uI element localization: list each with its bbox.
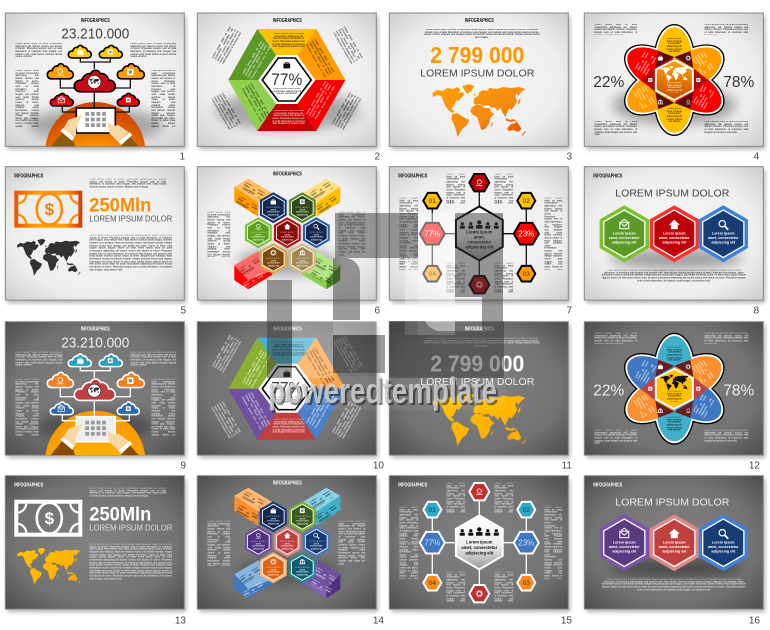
wing top right <box>301 488 340 526</box>
node 77 percent: 77% <box>424 230 440 239</box>
node 77 percent <box>420 532 445 554</box>
node 77 percent <box>420 223 445 245</box>
slide 4: atom flower, light <box>584 13 765 149</box>
node 04 <box>423 266 441 281</box>
connectors <box>432 493 526 594</box>
connectors <box>60 57 130 112</box>
heading: INFOGRAPHICS <box>81 327 110 333</box>
hexagon captions <box>249 207 325 268</box>
icon: banknote: $ <box>45 200 55 219</box>
text bottom: Lorem ipsum dolor sit amet, consectetur adipiscing elit. Mauris massa sed dictum et lorem. Phasellus tempor sem ut nulla bibendum, id maximus ante feugiat, sed pretium velit. Nulla facilisi vivamus lacinia neque ut tortor. Aliquam erat volutpat, etiam fermentum massa sed dictum blandit. Integer posuere lectus quis magna, sed mattis nisi porta. Donec in tellus vitae sapien dictum aliquet. Morbi vel nibh lorem ipsum dolor sit amet consectetur adipiscing elit mauris massa sed dictum et lorem. Phasellus tempor sem ut nulla bibendum, id maximus ante feugiat, sed pretium velit. Nulla facilisi vivamus lacinia neque ut tortor. Aliquam erat volutpat, etiam fermentum massa sed dictum blandit. Integer posuere lectus quis magna, sed mattis nisi porta. Donec in tellus vitae sapien dictum aliquet. Morbi vel nibh lorem ipsum dolor sit amet consectetur adipiscing elit mauris massa sed dictum et lorem. Phasellus tempor sem ut nulla bibendum, id maximus ante feugiat, sed pretium velit. <box>89 235 172 271</box>
slide 10: hexagon 77 percent, dark <box>197 322 378 458</box>
connectors <box>432 184 526 285</box>
node 02: 02 <box>523 507 530 514</box>
heading: INFOGRAPHICS <box>465 18 494 24</box>
shadow blob <box>237 557 337 585</box>
centre caption: amet, <box>474 235 485 240</box>
subtitle: LOREM IPSUM DOLOR <box>89 215 173 224</box>
orange half circle <box>46 102 145 146</box>
slide numbers: 14 <box>373 616 384 626</box>
node 01 <box>423 502 441 517</box>
shadow blob <box>237 248 337 276</box>
icon: banknote: $ <box>45 509 55 528</box>
tablet <box>76 108 115 133</box>
icon: banknote <box>16 193 80 226</box>
hexagon red: Lorem ipsum <box>663 232 686 236</box>
node 02 <box>517 193 535 208</box>
atom flower <box>616 24 733 136</box>
watermark: logo light wash <box>268 213 505 410</box>
slide numbers: 7 <box>566 306 572 316</box>
hexagon purple: amet, consectetur <box>609 545 640 549</box>
hexagon cluster <box>245 501 330 583</box>
slide numbers: 4 <box>753 152 759 162</box>
slide 8: three hexagons, light <box>584 167 765 303</box>
hexagon icons <box>256 508 319 564</box>
wing bottom left <box>234 560 272 598</box>
hexagon blue: Lorem ipsum <box>712 541 735 545</box>
node bottom <box>469 276 489 293</box>
big number: 2 799 000 <box>430 351 524 377</box>
left percentage: 22% <box>593 383 625 400</box>
icon: banknote <box>16 502 80 535</box>
node 04 <box>423 575 441 590</box>
slide numbers: 15 <box>561 616 572 626</box>
node 23 percent: 23% <box>518 539 534 548</box>
cloud network <box>47 354 144 415</box>
hexagon red: amet, consectetur <box>659 236 690 240</box>
watermark: brand wordmark: poweredtemplate <box>268 370 497 411</box>
node 02 <box>517 502 535 517</box>
hexagon purple <box>600 514 649 571</box>
hexagon blue <box>699 205 748 262</box>
slide numbers: 5 <box>180 306 186 316</box>
centre caption: adipiscing elit <box>465 551 494 556</box>
hexagon red <box>650 514 699 571</box>
slide 14: hexagon cluster, dark <box>197 476 378 612</box>
big figure: 250Mln <box>89 504 151 526</box>
hexagon cluster <box>245 192 330 274</box>
icon: globe <box>88 76 101 88</box>
heading: INFOGRAPHICS <box>273 172 302 178</box>
centre caption: consectetur <box>467 240 492 245</box>
slide numbers: 13 <box>175 616 186 626</box>
node 23 percent: 23% <box>518 230 534 239</box>
shadow blob <box>35 411 155 443</box>
world map <box>432 393 526 446</box>
subtitle: LOREM IPSUM DOLOR <box>420 67 535 79</box>
heading: INFOGRAPHICS <box>273 18 302 24</box>
hexagon captions <box>249 516 325 577</box>
slide numbers: 10 <box>373 460 384 472</box>
node 02: 02 <box>523 198 530 205</box>
wing top right <box>301 179 340 217</box>
slide 12: atom flower, dark <box>584 322 765 458</box>
right percentage: 78% <box>723 74 755 91</box>
centre hexagon <box>456 515 503 569</box>
hexagon green <box>600 205 649 262</box>
node 23 percent <box>514 532 539 554</box>
cloud icons <box>57 49 134 103</box>
node 03 <box>517 266 535 281</box>
flower icons <box>648 56 700 104</box>
wing top left <box>234 488 273 526</box>
slide 15: hub and spoke, dark <box>389 476 570 612</box>
atom flower <box>616 333 733 445</box>
node top <box>469 174 489 191</box>
centre caption: amet, consectetur <box>461 545 498 550</box>
hexagon purple: adipiscing elit <box>612 550 637 554</box>
text bottom: Lorem ipsum dolor sit amet, consectetur adipiscing elit. Mauris massa sed dictum et lorem. Phasellus tempor sem ut nulla bibendum, id maximus ante feugiat, sed pretium velit. Nulla facilisi vivamus lacinia neque ut tortor. Aliquam erat volutpat, etiam fermentum massa sed dictum blandit. Integer posuere lectus quis magna, sed mattis nisi porta. Donec in tellus vitae sapien dictum aliquet. Morbi vel nibh lorem ipsum dolor sit amet consectetur adipiscing elit mauris massa sed dictum et lorem. Phasellus tempor sem ut nulla bibendum, id maximus ante feugiat, sed pretium velit. Nulla facilisi vivamus lacinia neque ut tortor. Aliquam erat volutpat, etiam fermentum massa sed dictum blandit. Integer posuere lectus quis magna, sed mattis nisi porta. Donec in tellus vitae sapien dictum aliquet. Morbi vel nibh lorem ipsum dolor sit amet consectetur adipiscing elit mauris massa sed dictum et lorem. Phasellus tempor sem ut nulla bibendum, id maximus ante feugiat, sed pretium velit. <box>89 544 172 580</box>
world map <box>17 239 81 276</box>
node 04: 04 <box>429 580 436 587</box>
map in centre hexagon <box>661 375 689 391</box>
centre caption: adipiscing elit <box>465 245 494 250</box>
slide 9: cloud network, dark <box>4 321 189 460</box>
node 23 percent <box>514 223 539 245</box>
right percentage: 78% <box>723 383 755 400</box>
subtitle: LOREM IPSUM DOLOR <box>420 376 535 388</box>
left percentage: 22% <box>593 74 625 91</box>
connectors <box>60 366 130 421</box>
node bottom <box>469 585 489 602</box>
heading: INFOGRAPHICS <box>273 327 302 333</box>
shadow blob <box>612 85 736 125</box>
slide numbers: 8 <box>753 306 759 316</box>
percentage: 77% <box>271 70 302 89</box>
big number: 23.210.000 <box>61 26 129 43</box>
slide 2: hexagon 77 percent, light <box>197 13 378 149</box>
hexagon segments <box>228 338 345 440</box>
slide numbers <box>175 152 760 626</box>
wing bottom left <box>234 251 272 289</box>
slide numbers: 16 <box>749 616 760 626</box>
slide numbers: 2 <box>374 152 380 162</box>
text right: Lorem ipsum dolor sit amet consectetur adipiscing elit. Mauris massa sed dictum et lorem. Phasellus tempor sem ut nulla bibendum, id maximus ante feugiat, sed pretium velit. Nulla facilisi vivamus lacinia neque ut tortor. Aliquam erat volutpat, etiam fermentum massa sed dictum blandit. Integer posuere lectus quis magna, sed mattis nisi porta. <box>338 521 365 565</box>
shadow blob <box>610 249 742 269</box>
slide numbers: 6 <box>374 306 380 316</box>
hexagon green: adipiscing elit <box>612 240 637 244</box>
hexagon blue: adipiscing elit <box>711 240 736 244</box>
slide 6: hexagon cluster, light <box>197 167 378 303</box>
subtitle: LOREM IPSUM DOLOR <box>89 524 173 533</box>
hexagon red: Lorem ipsum <box>663 541 686 545</box>
node 01: 01 <box>429 198 436 205</box>
percentage: 77% <box>271 379 302 398</box>
node 03: 03 <box>523 580 530 587</box>
shadow blob <box>610 559 742 577</box>
slide 16: three hexagons, dark <box>584 476 765 612</box>
map in centre hexagon <box>661 66 689 82</box>
centre hexagon <box>258 364 315 413</box>
node 01 <box>423 193 441 208</box>
tablet <box>76 417 115 442</box>
hexagon segments <box>228 29 345 131</box>
text right: Lorem ipsum dolor sit amet consectetur adipiscing elit. Mauris massa sed dictum et lorem. Phasellus tempor sem ut nulla bibendum, id maximus ante feugiat, sed pretium velit. Nulla facilisi vivamus lacinia neque ut tortor. Aliquam erat volutpat, etiam fermentum massa sed dictum blandit. Integer posuere lectus quis magna, sed mattis nisi porta. <box>338 212 365 256</box>
heading: INFOGRAPHICS <box>398 483 427 489</box>
slide numbers: 9 <box>180 460 186 472</box>
title: LOREM IPSUM DOLOR <box>615 497 730 509</box>
slide numbers: 3 <box>566 152 572 162</box>
icon: team <box>460 527 499 536</box>
wing bottom right <box>302 251 340 289</box>
wing bottom right <box>302 560 340 598</box>
hexagon red: amet, consectetur <box>659 545 690 549</box>
slide numbers: 12 <box>749 460 760 472</box>
slide numbers: 11 <box>562 460 572 472</box>
node 03 <box>517 575 535 590</box>
hexagon green: amet, consectetur <box>609 236 640 240</box>
cloud icons <box>57 358 134 412</box>
watermark: brand wordmark: poweredtemplate <box>270 372 499 413</box>
heading: INFOGRAPHICS <box>593 174 622 180</box>
shadow blob <box>215 91 359 131</box>
flower icons <box>648 364 700 413</box>
icon: briefcase <box>283 62 290 68</box>
hexagon blue: Lorem ipsum <box>712 232 735 236</box>
hexagon purple: Lorem ipsum <box>613 541 636 545</box>
big number: 23.210.000 <box>61 334 129 351</box>
slide 11: world map headline, dark <box>389 322 570 458</box>
world map <box>17 548 81 585</box>
cloud network <box>47 45 144 106</box>
hexagon red: adipiscing elit <box>662 550 687 554</box>
hexagon blue: amet, consectetur <box>708 236 739 240</box>
heading: INFOGRAPHICS <box>81 18 110 24</box>
node 01: 01 <box>429 507 436 514</box>
centre caption: Lorem ipsum <box>466 540 493 545</box>
heading: INFOGRAPHICS <box>14 174 43 180</box>
centre hexagon <box>456 206 503 260</box>
heading: INFOGRAPHICS <box>465 327 494 333</box>
node 03: 03 <box>523 271 530 278</box>
icon: briefcase <box>283 371 290 377</box>
hands and sleeves <box>50 424 139 456</box>
heading: INFOGRAPHICS <box>273 481 302 487</box>
hexagon blue <box>699 514 748 571</box>
hexagon blue: adipiscing elit <box>711 550 736 554</box>
slide numbers: 1 <box>179 152 185 162</box>
icon: team <box>460 220 499 229</box>
slide 13: banknote headline, dark <box>5 476 186 612</box>
heading: INFOGRAPHICS <box>593 483 622 489</box>
slide 7: hub and spoke, light <box>389 167 570 303</box>
big figure: 250Mln <box>89 195 151 217</box>
heading: INFOGRAPHICS <box>398 174 427 180</box>
slide 1: cloud network, light <box>4 12 189 152</box>
hexagon red: adipiscing elit <box>662 240 687 244</box>
hexagon red <box>650 205 699 262</box>
big number: 2 799 000 <box>430 42 524 68</box>
hands and sleeves <box>50 115 139 147</box>
wing top left <box>234 179 273 217</box>
title: LOREM IPSUM DOLOR <box>615 188 730 200</box>
icon: globe <box>88 384 101 397</box>
node 04: 04 <box>429 271 436 278</box>
hexagon blue: amet, consectetur <box>708 545 739 549</box>
slide 3: world map headline, light <box>389 13 570 149</box>
world map <box>432 84 526 137</box>
centre hexagon <box>258 55 315 104</box>
yellow half circle <box>46 410 145 456</box>
node 77 percent: 77% <box>424 539 440 548</box>
centre caption: Lorem ipsum <box>466 230 493 235</box>
heading: INFOGRAPHICS <box>14 483 43 489</box>
node top <box>469 483 489 500</box>
shadow blob <box>27 107 163 143</box>
hexagon green: Lorem ipsum <box>613 232 636 236</box>
hexagon icons <box>256 199 319 255</box>
slide 5: banknote headline, light <box>5 167 186 303</box>
watermark: logo shapes <box>267 213 504 378</box>
